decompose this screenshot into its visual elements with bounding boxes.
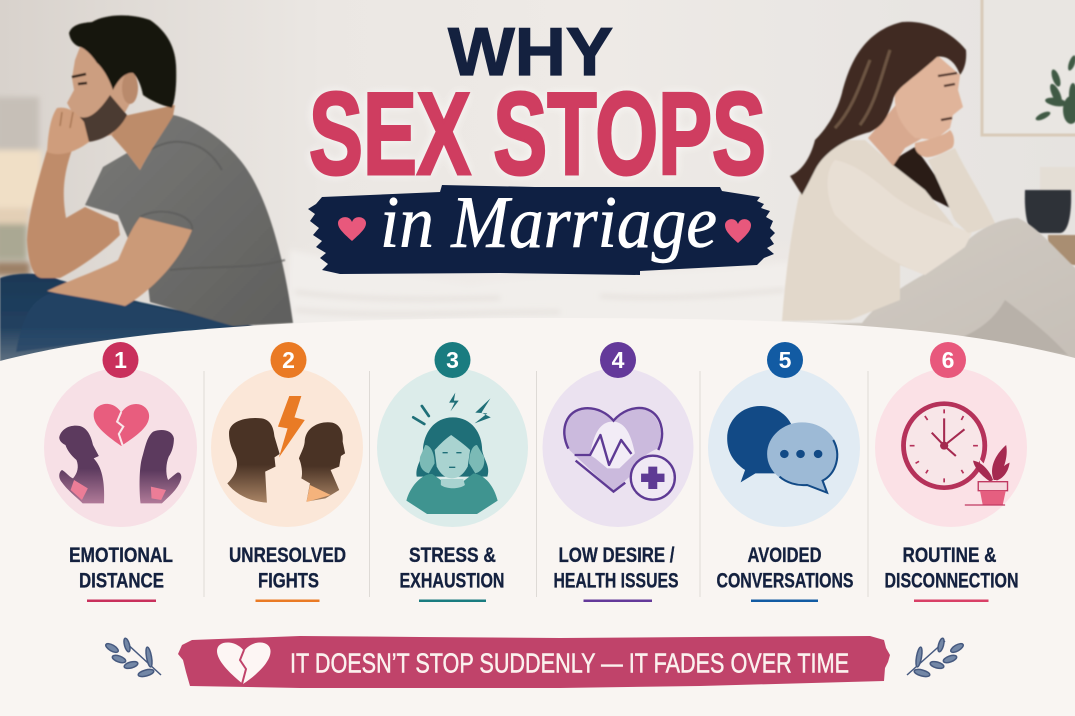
left heart [338, 217, 366, 241]
label [554, 544, 678, 592]
item 3: stress and exhaustion [377, 342, 528, 602]
man: ear [122, 72, 138, 104]
circle background [708, 368, 860, 527]
label: STRESS & [409, 544, 496, 567]
label: DISCONNECTION [884, 570, 1018, 592]
right heart [725, 219, 751, 243]
underline [256, 600, 320, 602]
icon: right laurel sprig [907, 638, 965, 678]
icon: speech bubbles [727, 406, 838, 493]
label [400, 544, 504, 592]
woman sitting, right [782, 22, 1075, 362]
icon: clock and plant [904, 404, 1010, 505]
underline [584, 600, 652, 602]
banner text: IT DOESN’T STOP SUDDENLY — IT FADES OVER TIME [290, 648, 849, 678]
circle background [44, 368, 197, 527]
icon: left laurel sprig [104, 638, 161, 678]
underline [87, 600, 156, 602]
title: why: WHY [448, 14, 613, 90]
number badge [600, 342, 636, 378]
number badge: 5 [779, 347, 792, 373]
woman: back hair [893, 147, 950, 208]
man: beard [80, 95, 127, 142]
number badge: 4 [612, 347, 625, 373]
woman: neck [868, 100, 928, 166]
man: face [67, 47, 135, 140]
woman: hair [790, 22, 966, 195]
man: jeans [0, 274, 262, 362]
column dividers [204, 371, 868, 597]
woman: brow, eye and lips [938, 73, 957, 120]
woman: pants [790, 218, 1075, 362]
woman: face [895, 55, 963, 140]
label: EXHAUSTION [400, 570, 504, 592]
underline [751, 600, 818, 602]
item 1: emotional distance [44, 342, 197, 602]
label: HEALTH ISSUES [554, 570, 678, 592]
label [69, 544, 173, 592]
number badge [102, 342, 138, 378]
man sitting, left [0, 15, 293, 362]
label [229, 544, 346, 592]
underline [419, 600, 486, 602]
white content panel with curved top [0, 318, 1075, 716]
subtitle text: in Marriage [380, 182, 717, 264]
blurred lamp and side table, left [0, 97, 42, 276]
man: t-shirt [85, 115, 293, 326]
woman: torso [782, 140, 960, 321]
item 6: routine and disconnection [875, 342, 1027, 602]
number badge [767, 342, 803, 378]
man: hair [69, 15, 176, 108]
item 2: unresolved fights [211, 342, 363, 602]
number badge: 1 [114, 347, 127, 373]
label: CONVERSATIONS [716, 570, 854, 592]
man: hand [47, 108, 89, 154]
icon: broken heart [217, 642, 271, 684]
banner brush shape [178, 636, 890, 688]
man: neck [105, 105, 175, 170]
woman: far arm [928, 148, 995, 233]
item 5: avoided conversations [708, 342, 860, 602]
brush banner: in Marriage [308, 182, 775, 275]
icon: stressed woman [406, 393, 498, 514]
icon: broken heart and two silhouettes [59, 404, 181, 503]
number badge [930, 342, 966, 378]
man: far arm [27, 150, 120, 278]
number badge: 2 [282, 347, 295, 373]
title: sex stops: SEX STOPS [309, 68, 766, 199]
circle background [875, 368, 1027, 527]
circle background [211, 368, 363, 527]
circle background [377, 368, 528, 527]
label: AVOIDED [748, 544, 822, 567]
photo background: bedroom wall [0, 0, 1075, 370]
icon: two heads and lightning [227, 396, 345, 503]
label: LOW DESIRE / [558, 544, 675, 567]
label: EMOTIONAL [69, 544, 173, 567]
label [716, 544, 854, 592]
number badge: 3 [446, 347, 459, 373]
icon: heart with pulse and plus [564, 408, 675, 500]
brush stroke shape [308, 185, 775, 275]
number badge [270, 342, 306, 378]
man: brow and eye [72, 74, 87, 84]
title [308, 14, 767, 199]
woman: hand [915, 130, 954, 157]
number badge [434, 342, 470, 378]
blurred frame, plant and pot, right [982, 0, 1075, 265]
man: near arm [47, 217, 192, 306]
label: ROUTINE & [902, 544, 996, 567]
bottom banner [178, 636, 890, 688]
label [884, 544, 1018, 592]
title: soft halo: SEX STOPS [308, 68, 767, 199]
man: sleeve seam and shirt folds [140, 142, 285, 270]
woman: lower leg shade [960, 300, 1068, 355]
label: FIGHTS [258, 570, 319, 592]
number badge: 6 [942, 347, 954, 373]
item 4: low desire and health issues [542, 342, 694, 602]
circle background [542, 368, 694, 527]
woman: near arm [828, 160, 972, 275]
label: UNRESOLVED [229, 544, 346, 567]
label: DISTANCE [79, 570, 164, 592]
underline [914, 600, 988, 602]
